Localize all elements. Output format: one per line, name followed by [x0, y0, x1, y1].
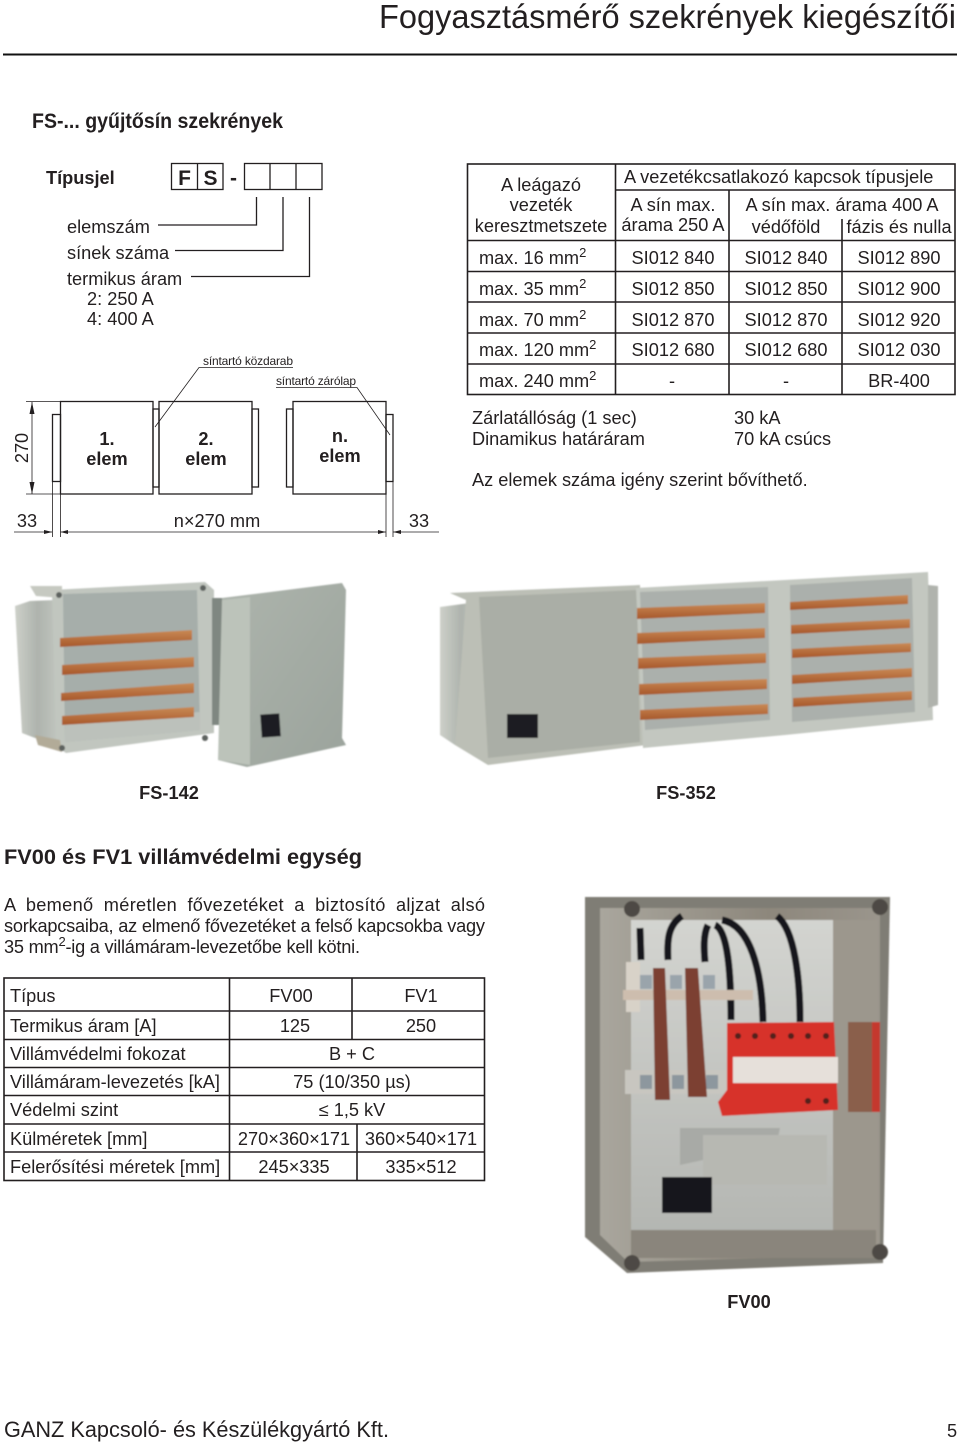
short-circuit ratings text: Zárlatállóság (1 sec)	[472, 408, 637, 428]
leader lines	[158, 197, 310, 276]
rating plate	[662, 1177, 712, 1213]
element n	[293, 402, 386, 494]
red surge arrester	[718, 1022, 838, 1116]
copper rails	[653, 968, 707, 1100]
table rows: SI012 870	[745, 310, 827, 330]
labels: elemszám, sínek száma, termikus áram: elemszám	[67, 217, 150, 237]
closed lid	[450, 585, 646, 765]
paragraph: sorkapcsaiba, az elmenő fővezetéket a felső kapcsokba vagy	[4, 916, 486, 936]
enclosure frame	[585, 897, 890, 1273]
table rows: 2	[579, 245, 586, 260]
table rows: SI012 030	[858, 340, 940, 360]
dimension: width: n×270 mm	[174, 511, 260, 531]
row values: 245×335	[258, 1157, 330, 1177]
page number: 5	[947, 1421, 957, 1441]
table: terminal types	[468, 164, 955, 394]
callout: síntartó zárólap: síntartó zárólap	[276, 374, 356, 388]
corner screws	[624, 899, 888, 1271]
table header: A sín max.	[631, 195, 715, 215]
section 1 copper bars	[637, 603, 768, 720]
table rows: SI012 840	[632, 248, 714, 268]
table rows: -	[669, 371, 675, 391]
element 1: 1.	[99, 429, 115, 449]
labels: elemszám, sínek száma, termikus áram: 4: 400 A	[87, 309, 155, 329]
table rows: BR-400	[868, 371, 930, 391]
row labels: Villámvédelmi fokozat	[10, 1044, 186, 1064]
callout: síntartó közdarab	[155, 354, 293, 427]
table header: A leágazó	[501, 175, 581, 195]
short-circuit ratings text: Dinamikus határáram	[472, 429, 645, 449]
table header	[475, 167, 952, 237]
table rows: SI012 680	[745, 340, 827, 360]
photo: FV00 enclosure	[585, 897, 890, 1273]
copper bars	[60, 630, 194, 725]
paragraph: A bemenő méretlen fővezetéket a biztosító aljzat alsó	[4, 895, 485, 915]
table rows: SI012 870	[632, 310, 714, 330]
table header: fázis és nulla	[846, 217, 952, 237]
paragraph: -ig a villámáram-levezetőbe kell kötni.	[65, 937, 360, 957]
rating plate	[260, 713, 281, 738]
table header: A vezetékcsatlakozó kapcsok típusjele	[624, 167, 933, 187]
table rows: max. 120 mm	[479, 340, 589, 360]
table rows: SI012 900	[858, 279, 940, 299]
caption: FV00: FV00	[727, 1292, 771, 1312]
row values: 125	[280, 1016, 310, 1036]
rating plate	[507, 714, 538, 738]
photo: FS-352 enclosure	[440, 572, 938, 765]
dimension: 270 height	[12, 402, 60, 494]
terminal blocks	[623, 962, 755, 1094]
table rows	[479, 245, 940, 391]
short-circuit ratings text: 70 kA csúcs	[734, 429, 831, 449]
row values	[238, 986, 477, 1177]
code boxes: F S: F	[178, 167, 191, 190]
code boxes: F S: S	[203, 167, 218, 190]
code boxes: F S: -	[230, 167, 237, 190]
table rows: 2	[589, 368, 596, 383]
grey inner box	[680, 1128, 780, 1165]
labels: elemszám, sínek száma, termikus áram: termikus áram	[67, 269, 182, 289]
left fins	[15, 600, 60, 742]
row values: FV1	[404, 986, 438, 1006]
row values: B + C	[329, 1044, 375, 1064]
row values: ≤ 1,5 kV	[319, 1100, 386, 1120]
heading: FV00 és FV1: FV00 és FV1 villámvédelmi egység	[4, 846, 362, 869]
short-circuit ratings text: Az elemek száma igény szerint bővíthető.	[472, 470, 808, 490]
side plates	[52, 409, 393, 487]
closed lid	[212, 598, 222, 725]
row values: 270×360×171	[238, 1129, 350, 1149]
row labels: Villámáram-levezetés [kA]	[10, 1072, 220, 1092]
table rows: SI012 850	[745, 279, 827, 299]
photo: FS-142 enclosure	[15, 582, 346, 767]
table rows: SI012 850	[632, 279, 714, 299]
row labels	[10, 986, 220, 1177]
section 1 frame	[636, 580, 785, 748]
left fins	[440, 603, 482, 745]
element 1	[60, 402, 153, 494]
labels: elemszám, sínek száma, termikus áram: sínek száma	[67, 243, 170, 263]
element 2	[159, 402, 252, 494]
short-circuit ratings text: 30 kA	[734, 408, 781, 428]
row labels: Felerősítési méretek [mm]	[10, 1157, 220, 1177]
row labels: Védelmi szint	[10, 1100, 118, 1120]
row values: FV00	[269, 986, 313, 1006]
label: Típusjel: Típusjel	[46, 168, 115, 188]
table rows: SI012 680	[632, 340, 714, 360]
dimension: width: 33	[409, 511, 429, 531]
element 2: elem	[185, 449, 227, 469]
row values: 360×540×171	[365, 1129, 477, 1149]
table header: A sín max. árama 400 A	[745, 195, 939, 215]
element 2: 2.	[198, 429, 214, 449]
row labels: Külméretek [mm]	[10, 1129, 147, 1149]
short-circuit ratings text	[472, 408, 831, 490]
table header: vezeték	[510, 195, 573, 215]
heading: FS gyűjtősín szekrények: FS-... gyűjtősín szekrények	[32, 110, 283, 133]
table rows: -	[783, 371, 789, 391]
table rows: SI012 920	[858, 310, 940, 330]
corner screws	[56, 585, 208, 751]
row labels: Típus	[10, 986, 56, 1006]
table rows: 2	[589, 337, 596, 352]
table rows: 2	[579, 307, 586, 322]
open box frame	[52, 582, 214, 753]
footer: company name: GANZ Kapcsoló- és Készülékgyártó Kft.	[4, 1417, 389, 1442]
row values: 75 (10/350 µs)	[293, 1072, 411, 1092]
caption: FS-352: FS-352	[656, 783, 716, 803]
black cables	[640, 916, 800, 1022]
table header: keresztmetszete	[475, 216, 607, 236]
table rows: 2	[579, 276, 586, 291]
table grid	[468, 164, 955, 394]
paragraph: 2	[58, 934, 66, 949]
dimension: width	[14, 481, 439, 537]
table rows: max. 70 mm	[479, 310, 579, 330]
box interior	[63, 590, 200, 742]
element n: elem	[319, 446, 361, 466]
labels: elemszám, sínek száma, termikus áram	[67, 217, 182, 329]
table header: védőföld	[752, 217, 820, 237]
paragraph	[4, 895, 486, 957]
dimension: width: 33	[17, 511, 37, 531]
labels: elemszám, sínek száma, termikus áram: 2: 250 A	[87, 289, 155, 309]
paragraph: 35 mm	[4, 937, 59, 957]
table rows: SI012 890	[858, 248, 940, 268]
row values: 335×512	[385, 1157, 457, 1177]
row values: 250	[406, 1016, 436, 1036]
section 2 copper bars	[790, 595, 912, 707]
element 1: elem	[86, 449, 128, 469]
dimension drawing: elements	[12, 354, 439, 537]
table grid	[4, 978, 484, 1180]
row labels: Termikus áram [A]	[10, 1016, 157, 1036]
back plate	[631, 920, 833, 1230]
table rows: max. 16 mm	[479, 248, 579, 268]
code boxes: blanks	[244, 164, 322, 190]
table rows: SI012 840	[745, 248, 827, 268]
code boxes: F S	[172, 164, 237, 190]
type code diagram	[46, 164, 322, 329]
table rows: max. 240 mm	[479, 371, 589, 391]
table: FV specs	[4, 978, 484, 1180]
element n: n.	[332, 426, 348, 446]
caption: FS-142: FS-142	[139, 783, 199, 803]
table rows: max. 35 mm	[479, 279, 579, 299]
callout: síntartó közdarab: síntartó közdarab	[203, 354, 293, 368]
table header: árama 250 A	[621, 215, 725, 235]
callout: síntartó zárólap	[276, 374, 390, 435]
section 2 frame	[785, 572, 933, 735]
dimension: 270 height: 270	[12, 433, 32, 463]
